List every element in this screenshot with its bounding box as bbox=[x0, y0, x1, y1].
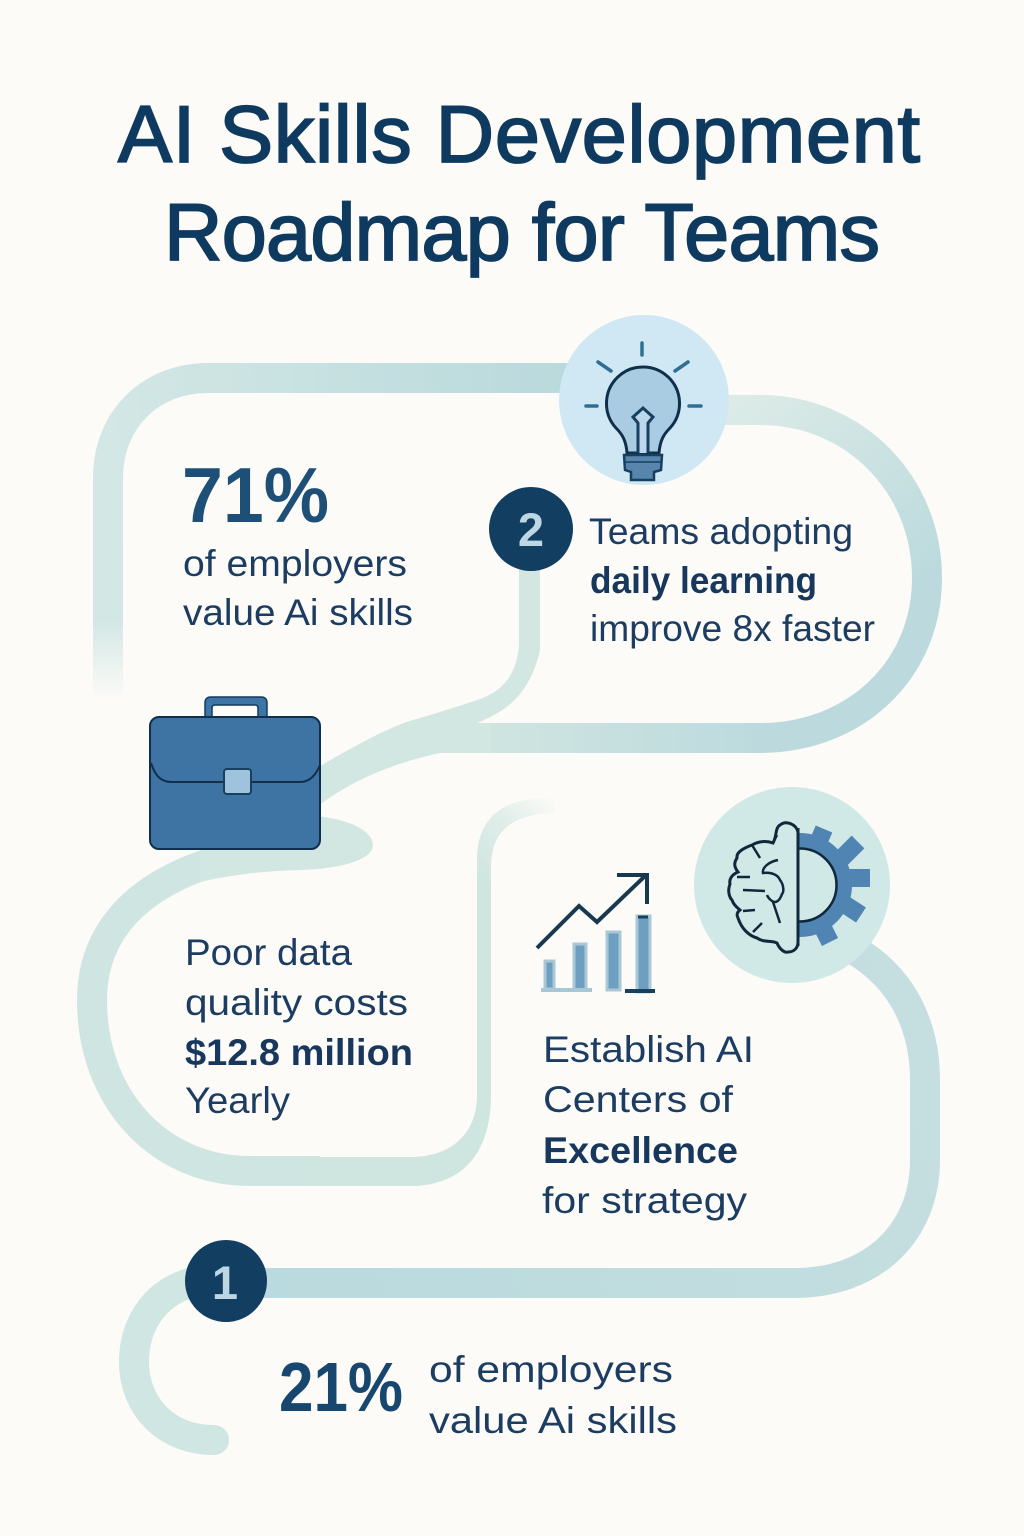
title: Roadmap for Teams bbox=[164, 188, 880, 278]
text: centers of excellence: Excellence bbox=[543, 1130, 738, 1171]
text: daily learning: daily learning bbox=[590, 560, 817, 601]
stat: 71 percent: 71% bbox=[182, 451, 329, 539]
stat: 71 percent bbox=[182, 451, 413, 633]
text: daily learning: improve 8x faster bbox=[590, 608, 875, 649]
roadmap path: right loop bbox=[470, 410, 927, 738]
text: data quality cost: quality costs bbox=[185, 982, 408, 1023]
icon: lightbulb bbox=[559, 315, 729, 485]
text: data quality cost: Poor data bbox=[185, 932, 352, 973]
text: centers of excellence: Centers of bbox=[543, 1079, 734, 1120]
text: data quality cost bbox=[185, 932, 413, 1121]
stat: 21 percent bbox=[279, 1348, 677, 1441]
marker 2 bbox=[489, 487, 573, 571]
stat: 71 percent: of employers bbox=[183, 543, 407, 584]
roadmap path: middle loop bbox=[92, 798, 555, 1186]
marker 1 bbox=[185, 1240, 267, 1322]
text: centers of excellence bbox=[542, 1029, 754, 1221]
text: data quality cost: Yearly bbox=[185, 1080, 291, 1121]
stat: 71 percent: value Ai skills bbox=[183, 592, 413, 633]
text: centers of excellence: for strategy bbox=[542, 1180, 748, 1221]
title: AI Skills Development bbox=[118, 90, 920, 180]
marker 1: 1 bbox=[212, 1256, 238, 1309]
icon: briefcase bbox=[150, 697, 320, 849]
marker 2: 2 bbox=[518, 503, 544, 556]
text: centers of excellence: Establish AI bbox=[543, 1029, 754, 1070]
roadmap path: lower segment bbox=[134, 945, 925, 1440]
stat: 21 percent: value Ai skills bbox=[429, 1400, 677, 1441]
roadmap path: connector from marker 2 bbox=[300, 560, 540, 815]
stat: 21 percent: 21% bbox=[279, 1348, 403, 1426]
title bbox=[118, 90, 920, 278]
stat: 21 percent: of employers bbox=[429, 1349, 673, 1390]
icon: growth chart bbox=[537, 875, 655, 992]
text: daily learning: Teams adopting bbox=[589, 511, 853, 552]
text: data quality cost: $12.8 million bbox=[185, 1032, 413, 1073]
icon: brain and gear bbox=[694, 787, 890, 983]
roadmap path: top left segment bbox=[108, 378, 575, 700]
text: daily learning bbox=[589, 511, 875, 649]
